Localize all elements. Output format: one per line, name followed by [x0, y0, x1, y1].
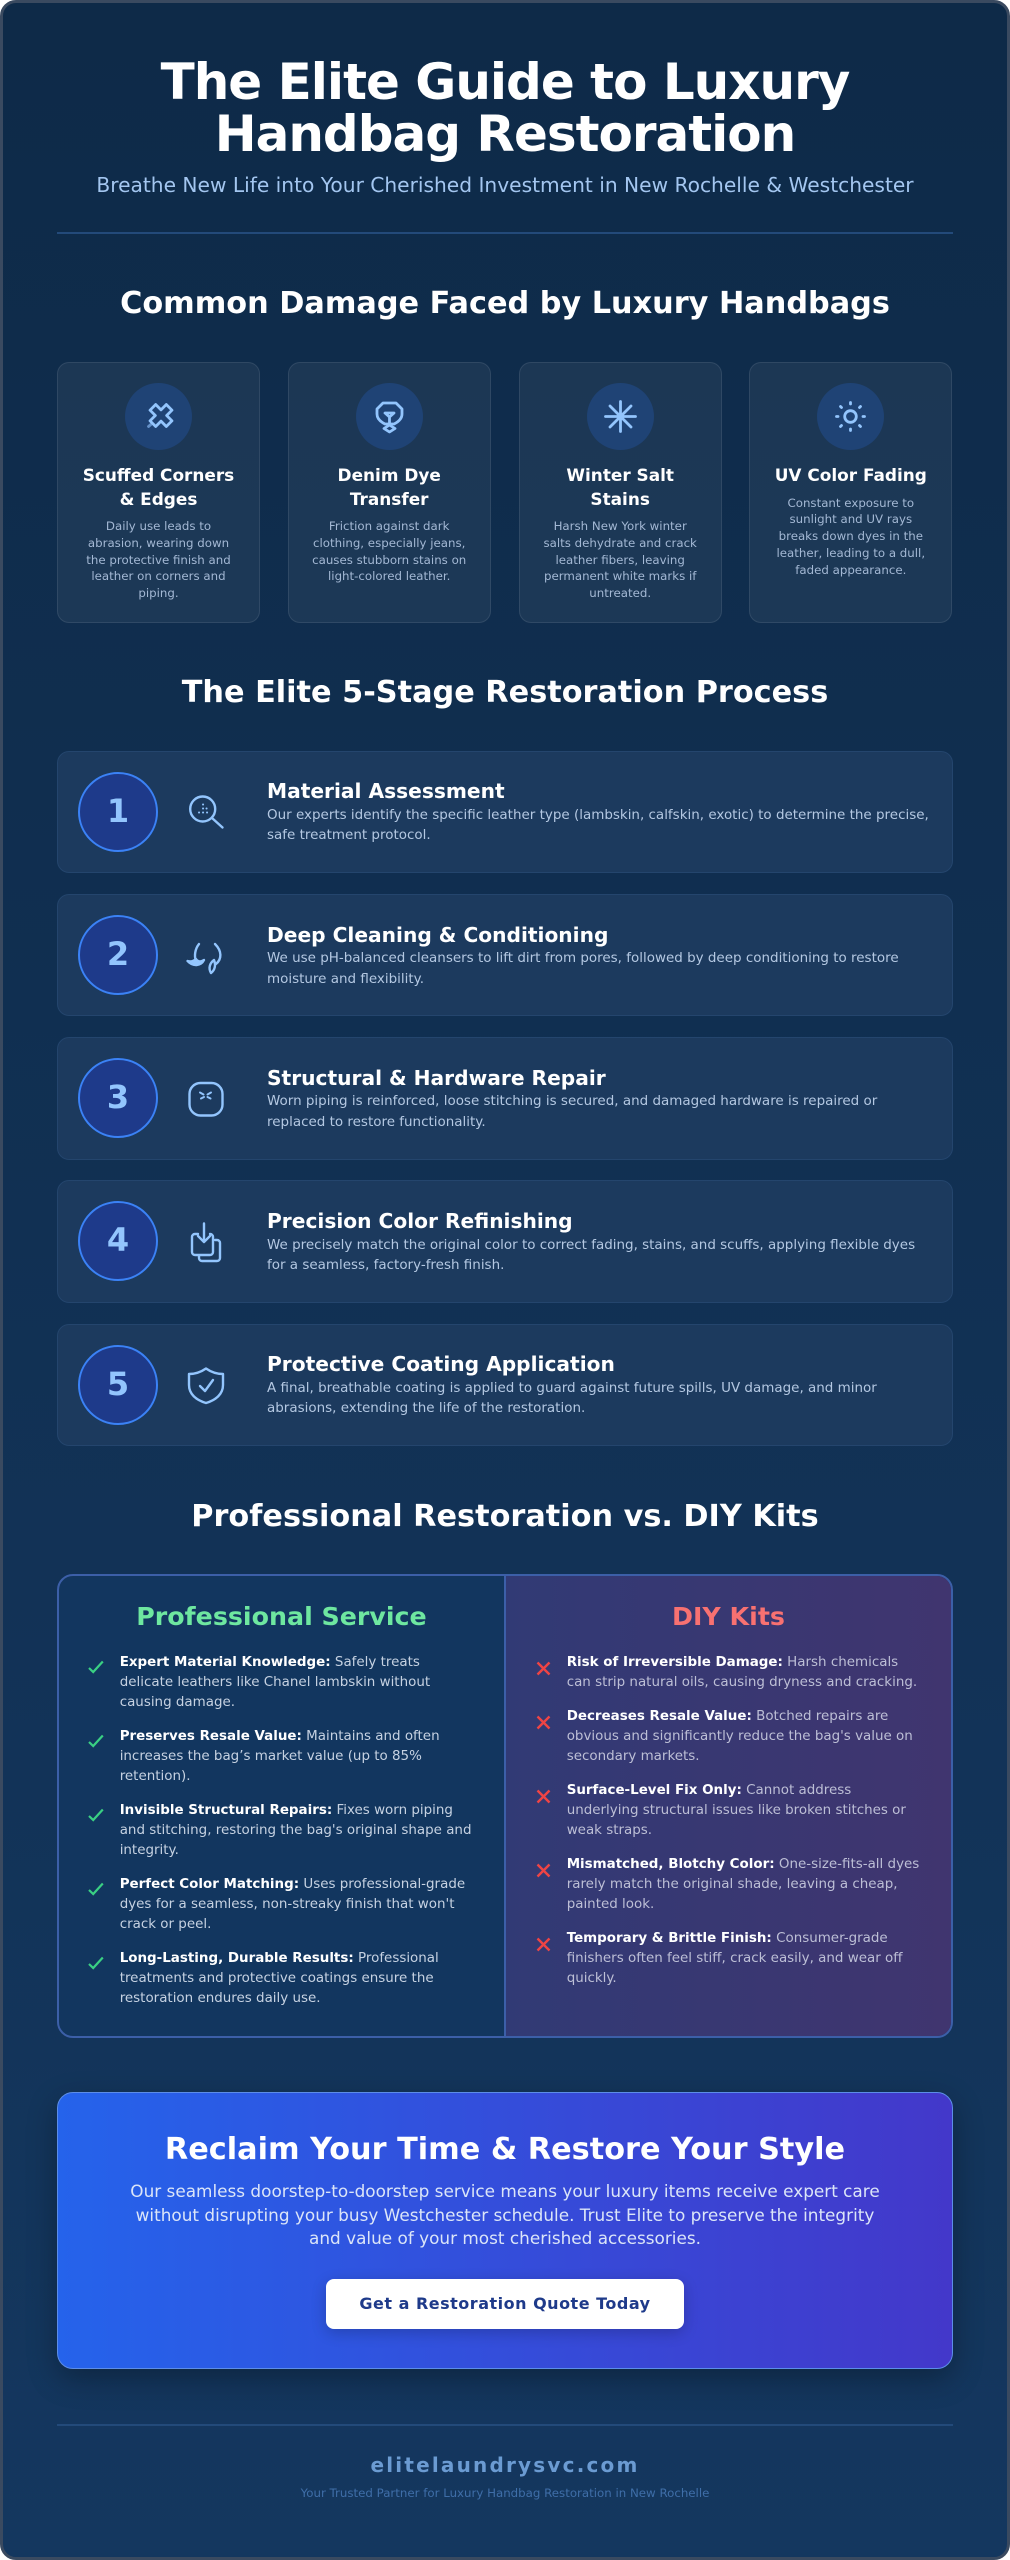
cta text [130, 2181, 880, 2248]
icon: shield [188, 1367, 224, 1404]
step description: Our experts identify the specific leather type (lambskin, calfskin, exotic) to determine the precise, [267, 807, 929, 823]
list item: crack or peel. [120, 1917, 211, 1932]
cta text: and value of your most cherished accessories. [309, 2228, 701, 2248]
step description: Worn piping is reinforced, loose stitching is secured, and damaged hardware is repaired or [267, 1093, 877, 1109]
list item: delicate leathers like Chanel lambskin without [120, 1675, 430, 1690]
step title: Protective Coating Application [267, 1352, 615, 1376]
step number: 3 [107, 1078, 129, 1116]
list item: rarely match the original shade, leaving a cheap, [567, 1877, 898, 1892]
card description [312, 519, 466, 583]
subtitle: Breathe New Life into Your Cherished Investment in New Rochelle & Westchester [96, 173, 914, 197]
list item [536, 1708, 913, 1764]
card description: leather fibers, leaving [555, 553, 685, 567]
list item: dyes for a seamless, non-streaky finish that won't [120, 1897, 454, 1912]
card description: piping. [138, 586, 179, 600]
card title: & Edges [120, 488, 197, 508]
cta text: Our seamless doorstep-to-doorstep service means your luxury items receive expert care [130, 2181, 880, 2201]
step number: 5 [107, 1364, 129, 1402]
list item: Invisible Structural Repairs: Fixes worn piping [120, 1803, 453, 1818]
card title: Denim Dye [338, 465, 441, 485]
step description [267, 1380, 877, 1416]
panel: step 4 [57, 1180, 953, 1303]
card description: Constant exposure to [788, 496, 914, 510]
list item: retention). [120, 1769, 190, 1784]
footer domain: elitelaundrysvc.com [370, 2453, 640, 2477]
title: The Elite Guide to Luxury [161, 53, 849, 111]
list item [88, 1877, 465, 1932]
card description: causes stubborn stains on [312, 553, 466, 567]
step number [78, 1058, 158, 1138]
list item: increases the bag’s market value (up to 85% [120, 1749, 422, 1764]
list item: restoration endures daily use. [120, 1991, 321, 2006]
list item: secondary markets. [567, 1749, 700, 1764]
button: Get a Restoration Quote Today [359, 2294, 651, 2313]
list item [88, 1729, 440, 1784]
step description: replaced to restore functionality. [267, 1114, 486, 1130]
card description: Daily use leads to [106, 519, 211, 533]
list item: Preserves Resale Value: Maintains and often [120, 1729, 440, 1744]
list item: and stitching, restoring the bag's original shape and [120, 1823, 471, 1838]
heading: restoration process: The Elite 5-Stage Restoration Process [182, 675, 828, 710]
icon: color layers [190, 1222, 222, 1262]
list item: painted look. [567, 1897, 654, 1912]
icon: cleaning drops [186, 942, 222, 974]
list item: can strip natural oils, causing dryness and cracking. [567, 1675, 917, 1690]
card title [83, 465, 234, 508]
card title [338, 465, 441, 508]
panel: step 5 [57, 1324, 953, 1446]
card description: Friction against dark [329, 519, 449, 533]
card description: clothing, especially jeans, [313, 536, 465, 550]
heading: common damage: Common Damage Faced by Luxury Handbags [120, 286, 890, 321]
column heading: DIY Kits [672, 1602, 785, 1631]
card title: Stains [590, 488, 650, 508]
button [326, 2279, 684, 2329]
step description: We use pH-balanced cleansers to lift dirt from pores, followed by deep conditioning to restore [267, 950, 899, 966]
step title: Precision Color Refinishing [267, 1209, 573, 1233]
list item [536, 1655, 917, 1690]
card description: leather on corners and [91, 569, 226, 583]
step number: 2 [107, 935, 129, 973]
panel: winter salt card [519, 362, 722, 623]
step description: for a seamless, factory-fresh finish. [267, 1257, 504, 1273]
panel: comparison [57, 1574, 953, 2038]
card description: breaks down dyes in the [779, 529, 923, 543]
step title: Structural & Hardware Repair [267, 1066, 606, 1090]
list item: Mismatched, Blotchy Color: One-size-fits-all dyes [567, 1856, 919, 1872]
card description: light-colored leather. [328, 569, 450, 583]
card title [566, 465, 674, 508]
list item: Decreases Resale Value: Botched repairs are [567, 1708, 888, 1724]
icon: snowflake [587, 383, 654, 450]
list item [536, 1782, 906, 1838]
list item: weak straps. [567, 1823, 652, 1838]
card description: faded appearance. [795, 563, 906, 577]
step title: Material Assessment [267, 779, 505, 803]
heading: professional vs diy: Professional Restoration vs. DIY Kits [191, 1499, 819, 1534]
list item: Surface-Level Fix Only: Cannot address [567, 1782, 851, 1798]
title: Handbag Restoration [215, 105, 795, 163]
icon: bandage [125, 383, 192, 450]
icon: sun [817, 383, 884, 450]
list item [536, 1930, 903, 1986]
panel: step 2 [57, 894, 953, 1016]
list item: finishers often feel stiff, crack easily, and wear off [567, 1951, 902, 1966]
list item: causing damage. [120, 1695, 235, 1710]
step number: 4 [107, 1221, 129, 1259]
step number [78, 915, 158, 995]
step title: Deep Cleaning & Conditioning [267, 923, 608, 947]
cta heading: Reclaim Your Time & Restore Your Style [165, 2132, 845, 2167]
step description [267, 1237, 915, 1273]
card title: Transfer [350, 488, 428, 508]
list item: obvious and significantly reduce the bag's value on [567, 1729, 913, 1744]
step description [267, 950, 899, 987]
card description: Harsh New York winter [554, 519, 687, 533]
list item: quickly. [567, 1971, 617, 1986]
list item: Long-Lasting, Durable Results: Professional [120, 1951, 439, 1966]
step description: abrasions, extending the life of the restoration. [267, 1400, 585, 1416]
step description: safe treatment protocol. [267, 827, 431, 843]
step description: A final, breathable coating is applied to guard against future spills, UV damage, and minor [267, 1380, 877, 1396]
list item [88, 1655, 430, 1710]
card description: the protective finish and [86, 553, 231, 567]
panel: diy kits [506, 1576, 951, 2036]
step number [78, 1344, 158, 1424]
list item: Perfect Color Matching: Uses professional-grade [120, 1877, 465, 1892]
panel: denim dye card [288, 362, 491, 623]
step description [267, 1093, 878, 1130]
list item: integrity. [120, 1843, 179, 1858]
step description [267, 807, 929, 843]
step number [78, 772, 158, 852]
card description [543, 519, 697, 600]
list item: Risk of Irreversible Damage: Harsh chemicals [567, 1655, 898, 1670]
panel: scuffed corners card [57, 362, 260, 623]
panel: uv fading card [749, 362, 952, 623]
list item: treatments and protective coatings ensure the [120, 1971, 434, 1986]
card description: salts dehydrate and crack [543, 536, 697, 550]
card description: sunlight and UV rays [789, 512, 912, 526]
panel: step 3 [57, 1037, 953, 1160]
card description: abrasion, wearing down [88, 536, 229, 550]
list item: underlying structural issues like broken stitches or [567, 1803, 906, 1818]
card description: permanent white marks if [544, 569, 696, 583]
card title: Scuffed Corners [83, 465, 234, 485]
card description [86, 519, 231, 600]
card title: Winter Salt [566, 465, 674, 485]
panel: step 1 [57, 751, 953, 873]
card title: UV Color Fading [775, 465, 927, 485]
list item: Temporary & Brittle Finish: Consumer-grade [567, 1930, 888, 1946]
list item [536, 1856, 919, 1912]
cta text: without disrupting your busy Westchester schedule. Trust Elite to preserve the integrity [136, 2205, 874, 2225]
list item: Expert Material Knowledge: Safely treats [120, 1655, 420, 1670]
title [160, 53, 850, 163]
panel: professional service [59, 1576, 506, 2036]
icon: magnifier [189, 795, 224, 829]
panel: call to action [57, 2092, 953, 2369]
card description: leather, leading to a dull, [777, 546, 925, 560]
step description: moisture and flexibility. [267, 971, 424, 987]
card description: untreated. [589, 586, 651, 600]
card description [777, 496, 925, 577]
list item [88, 1803, 471, 1858]
step number [78, 1201, 158, 1281]
list item [88, 1951, 439, 2006]
icon: repair stitch [188, 1082, 224, 1117]
footer tagline: Your Trusted Partner for Luxury Handbag Restoration in New Rochelle [301, 2486, 709, 2500]
icon: denim dye [356, 383, 423, 450]
column heading: Professional Service [136, 1602, 427, 1631]
step description: We precisely match the original color to correct fading, stains, and scuffs, applying flexible dyes [267, 1237, 915, 1253]
step number: 1 [107, 792, 129, 830]
